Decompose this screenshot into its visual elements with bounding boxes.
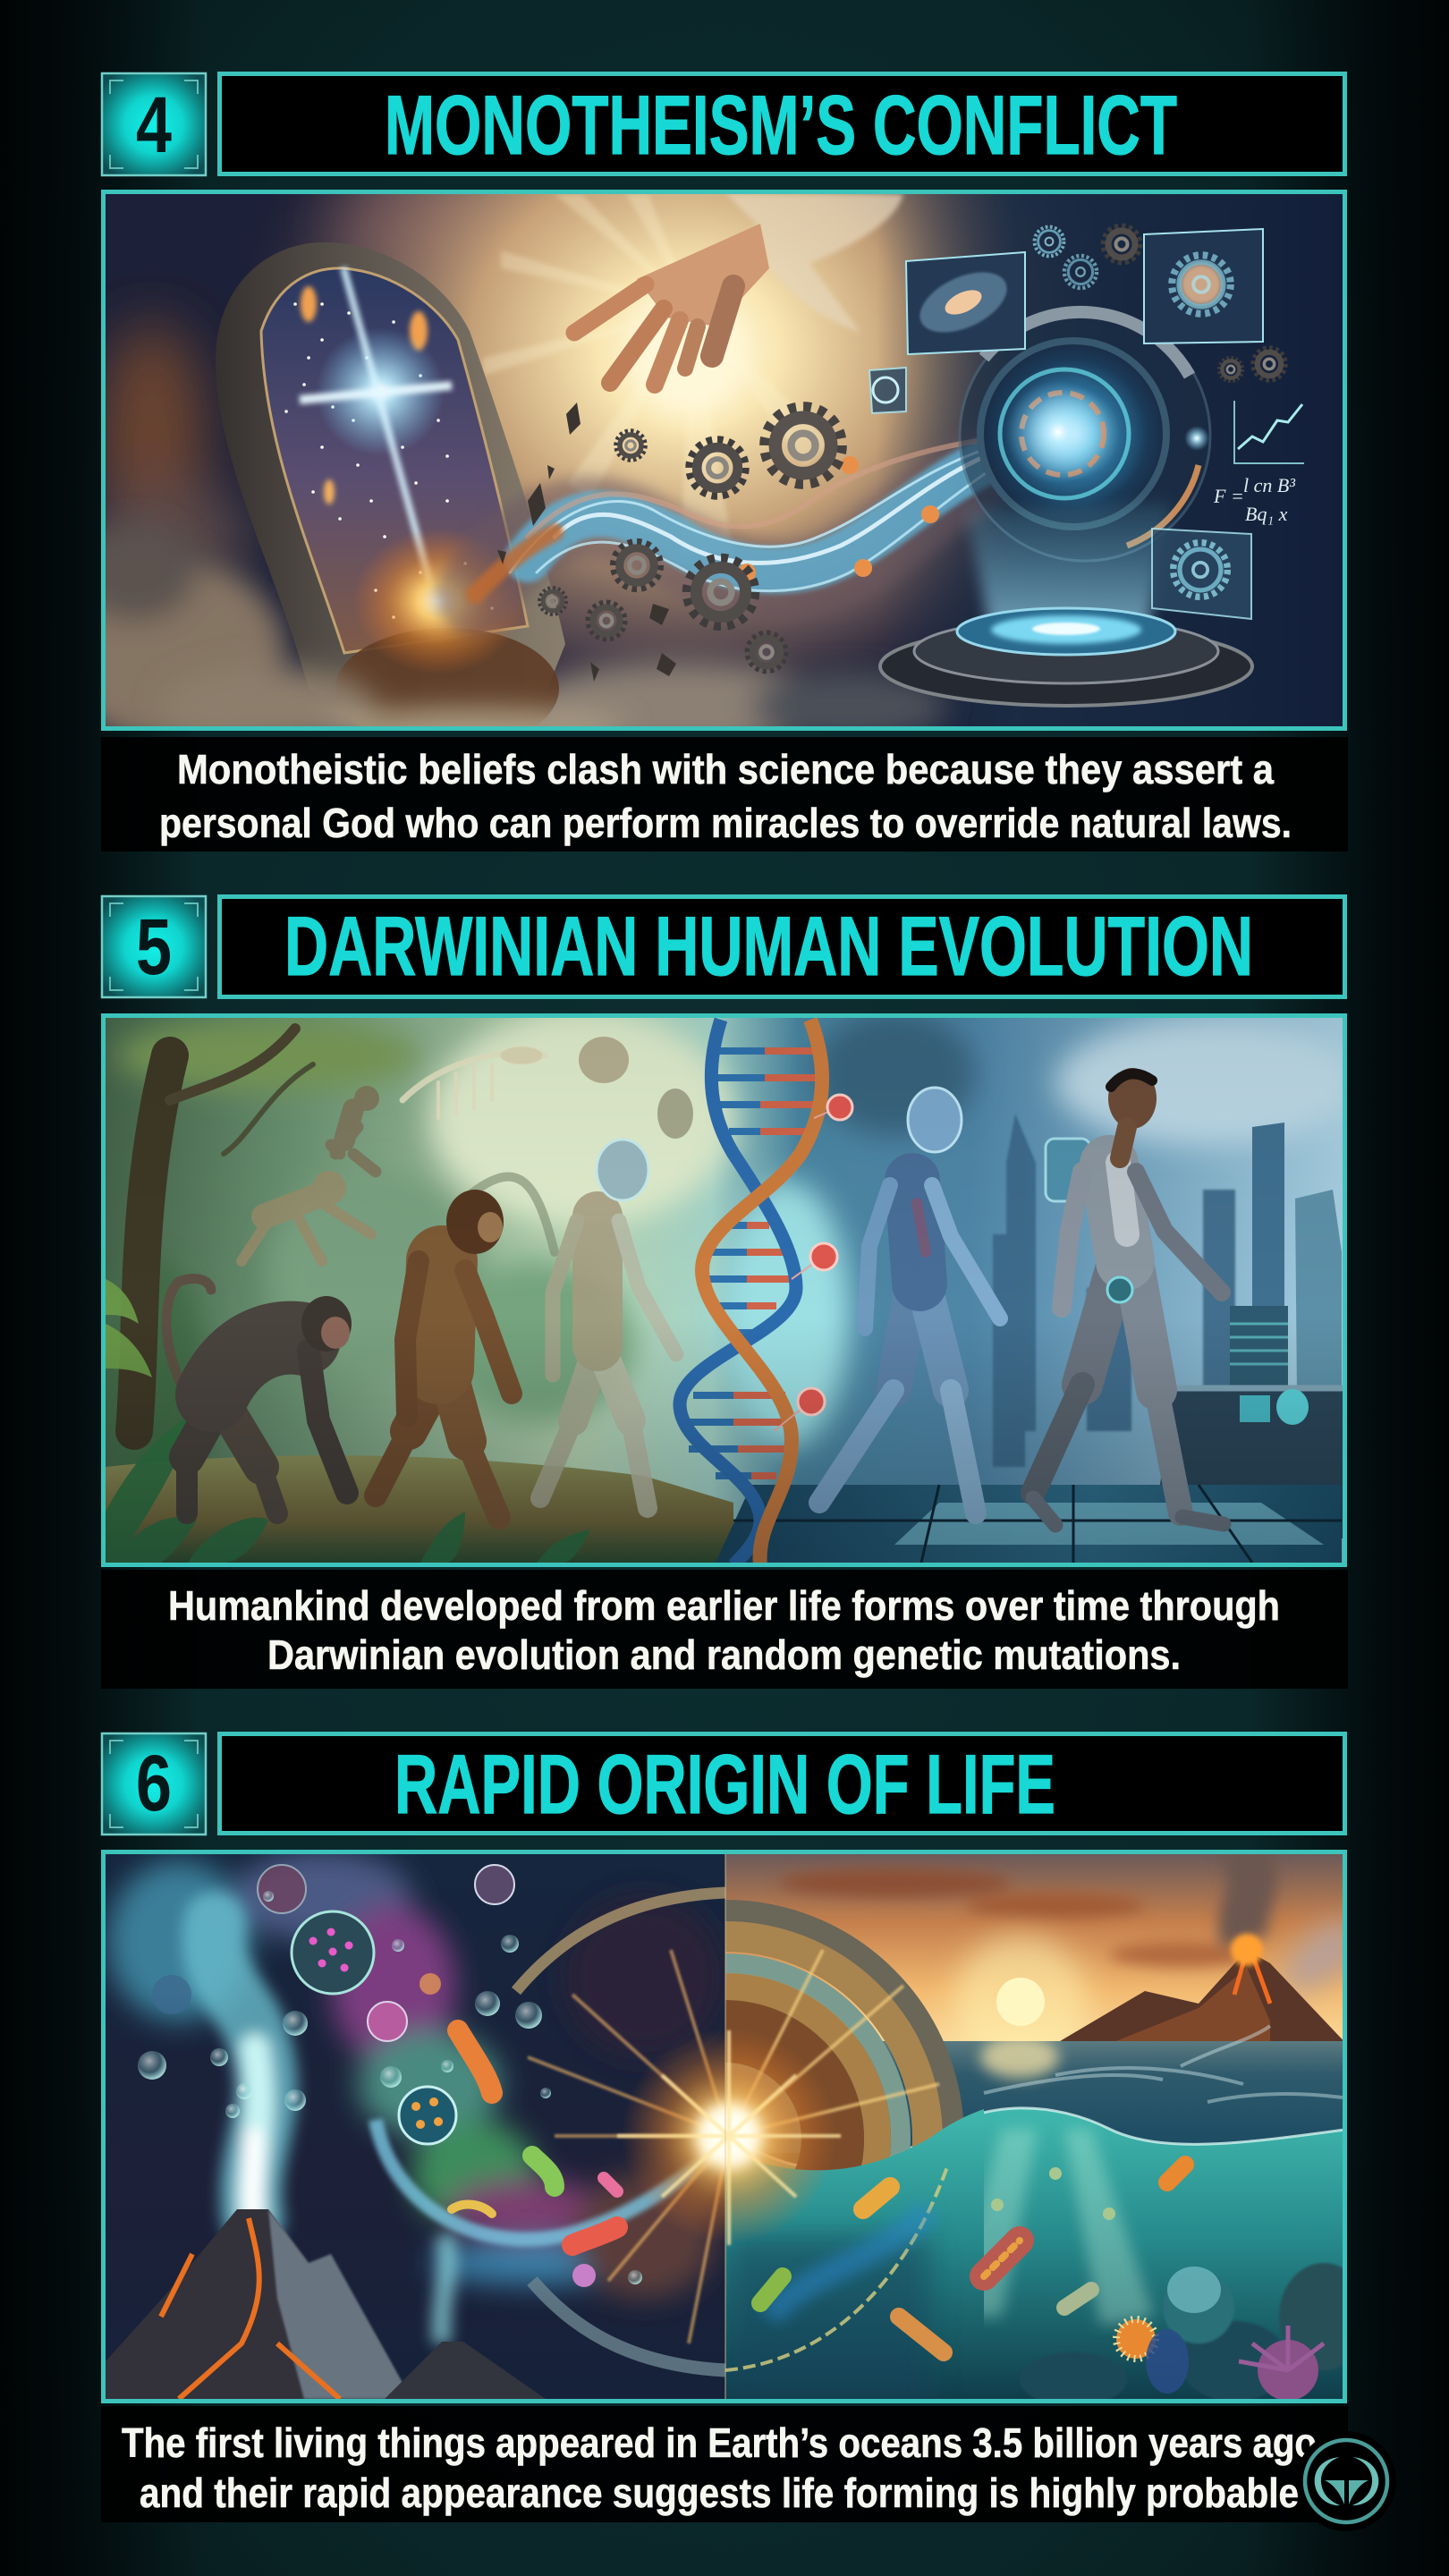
timeline arc under water [725, 2165, 948, 2370]
microbes on left [452, 2030, 617, 2245]
growth graph [1234, 401, 1304, 463]
hologram screens [869, 229, 1263, 619]
volcano on horizon [1055, 1843, 1351, 2048]
hologram beam [966, 501, 1172, 644]
number badge 4: 4 [136, 80, 172, 169]
flowing data ribbon [475, 432, 1058, 595]
formula: F = [1213, 485, 1244, 507]
background silhouettes: small ape and walking primate [242, 1086, 379, 1261]
flying gears [540, 409, 840, 670]
clouds in front of tablet base [179, 649, 624, 726]
jungle trunk and foliage [134, 1029, 555, 1431]
nebula [106, 194, 512, 580]
illustration: origin of life, volcano, cells, earth layers and ocean [106, 1843, 1368, 2406]
left timeline arc [516, 1893, 725, 2370]
stone shards [497, 402, 676, 682]
caption: and their rapid appearance suggests life forming is highly probable [140, 2470, 1299, 2516]
future city skyline [993, 1114, 1343, 1538]
number badge 5: 5 [136, 902, 172, 991]
holographic platform [880, 608, 1252, 706]
plants [106, 1279, 590, 1563]
image frame [104, 191, 1345, 728]
volcano [106, 2209, 546, 2399]
left half dark cosmos [106, 1852, 732, 2399]
title bar: RAPID ORIGIN OF LIFE [394, 1737, 1055, 1831]
figure 5: cyborg [1033, 1068, 1224, 1525]
caption [101, 737, 1348, 852]
logo badge [1296, 2431, 1396, 2531]
stone tablet [216, 242, 565, 716]
dinosaur skeleton and fossil skulls [402, 1037, 693, 1139]
image frame [104, 1852, 1345, 2401]
image frame [104, 1016, 1345, 1565]
illustration: evolution from ape to cyborg [106, 1011, 1360, 1565]
number badge 6 [102, 1733, 206, 1835]
divine sleeve [726, 194, 903, 333]
divine hand [574, 224, 769, 416]
illustration: hand, tablet and gears flowing into science portal [106, 194, 1343, 726]
caption [101, 2406, 1348, 2522]
caption: Monotheistic beliefs clash with science because they assert a [177, 746, 1274, 792]
glowing cross [300, 267, 452, 597]
formula: Bq₁ x [1245, 503, 1288, 525]
figure 3: translucent hominid [540, 1140, 676, 1508]
small second geyser [441, 2236, 448, 2343]
figure 2: early hominid [376, 1190, 512, 1518]
holographic portal ring [960, 310, 1210, 561]
sea surface [725, 2041, 1352, 2153]
caption: personal God who can perform miracles to override natural laws. [159, 800, 1292, 846]
section 5: darwinian human evolution [101, 896, 1360, 1689]
number badge 4 [102, 73, 206, 175]
rays left of burst [528, 1950, 729, 2343]
caption: The first living things appeared in Earth’s oceans 3.5 billion years ago [122, 2419, 1317, 2466]
clouds behind [106, 521, 955, 726]
seafloor rocks [903, 2263, 1368, 2406]
central holy glow [277, 194, 1013, 680]
ground [106, 1455, 733, 1563]
formula: l cn B³ [1243, 474, 1295, 496]
misty jungle background [107, 1011, 1360, 1530]
light shafts [948, 2129, 1154, 2326]
caption: Darwinian evolution and random genetic mutations. [267, 1631, 1181, 1678]
section 4: monotheism's conflict [100, 72, 1348, 852]
water-blue flow toward burst [376, 2120, 729, 2240]
underwater [725, 2108, 1352, 2406]
caption: Humankind developed from earlier life forms over time through [168, 1582, 1280, 1629]
dna double helix [680, 1020, 822, 1565]
futuristic floor [716, 1485, 1342, 1563]
re-cover earth below waterline [725, 2109, 984, 2406]
central light burst [617, 2029, 841, 2245]
number badge 6: 6 [136, 1738, 172, 1827]
marine microbes [760, 2165, 1185, 2352]
sun [996, 1978, 1045, 2026]
number badge 5 [102, 896, 206, 997]
small upper gears [1035, 227, 1284, 380]
vertical dividing line [724, 1854, 726, 2399]
geyser plume [213, 1923, 267, 2218]
section 6: rapid origin of life [101, 1733, 1368, 2522]
formula [1213, 474, 1295, 525]
earth strata half dome [497, 1911, 953, 2367]
dark navy right side [877, 194, 1343, 726]
right half: sky, sea and underwater [497, 1843, 1368, 2406]
light rays [483, 194, 832, 555]
figure 1: monkey [166, 1279, 352, 1513]
mutation markers [774, 1095, 852, 1431]
impact dome and burst [336, 531, 559, 726]
caption [101, 1570, 1348, 1689]
primordial cells [138, 1865, 642, 2287]
spiky and purple organisms [1116, 2267, 1324, 2401]
figure 4: translucent blue human [819, 1088, 1000, 1513]
coloured nebula smoke [107, 1852, 724, 2299]
sunset sky [725, 1854, 1352, 2046]
